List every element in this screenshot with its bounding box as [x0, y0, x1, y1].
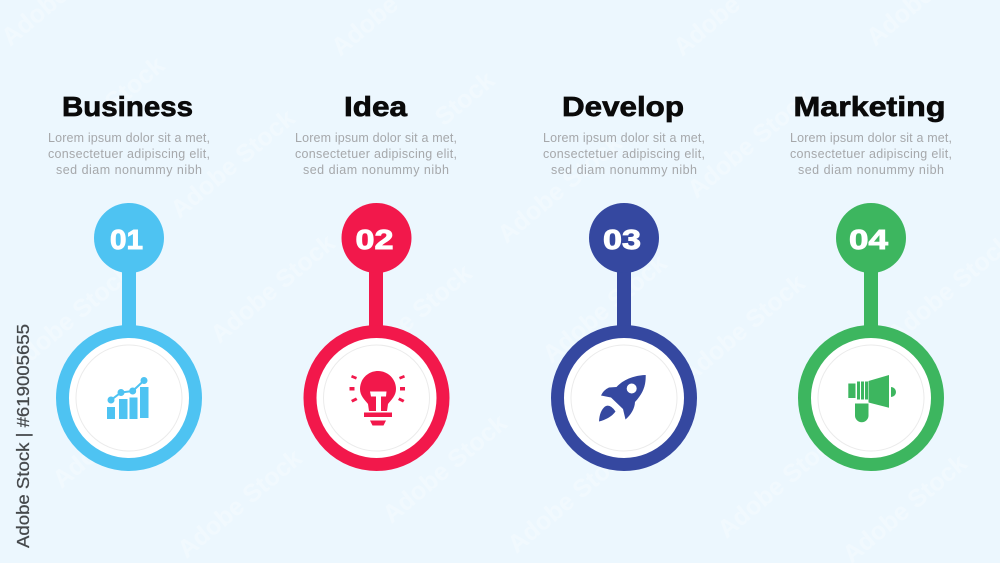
text: Adobe Stock	[205, 229, 340, 349]
text: Adobe Stock	[377, 409, 512, 529]
text block: Idea description: sed diam nonummy nibh	[303, 163, 449, 177]
text: Stock	[100, 51, 170, 116]
ring	[310, 332, 443, 464]
stem	[617, 265, 631, 335]
icon: megaphone	[848, 375, 896, 422]
stem	[864, 265, 878, 335]
text block: Marketing description	[790, 131, 952, 177]
number badge 02: 02	[356, 224, 394, 255]
number badge 04	[836, 203, 906, 273]
text block: Marketing description: sed diam nonummy nibh	[798, 163, 944, 177]
ring	[62, 332, 196, 464]
column: Business	[48, 91, 210, 464]
column: Marketing	[790, 91, 952, 464]
heading: Develop: Develop	[562, 91, 684, 122]
text block: Idea description: consectetuer adipiscing elit,	[295, 147, 457, 161]
number badge 03: 03	[603, 224, 641, 255]
number badge 02	[342, 203, 412, 273]
column: Develop	[543, 91, 705, 464]
text: Adobe Stock	[492, 129, 627, 249]
text: Adobe Stock	[47, 374, 182, 494]
icon: rocket	[599, 375, 646, 422]
number badge 01	[94, 203, 164, 273]
text block: Develop description	[543, 131, 705, 177]
text block: Idea description	[295, 131, 457, 177]
text: Adobe Stock	[502, 439, 637, 559]
text block: Develop description: sed diam nonummy nibh	[551, 163, 697, 177]
text block: Marketing description: Lorem ipsum dolor sit a met,	[790, 131, 952, 145]
text: Adobe Stock	[165, 104, 300, 224]
stem	[369, 265, 383, 335]
text: Adobe Stock	[2, 259, 137, 379]
text block: Idea description: Lorem ipsum dolor sit a met,	[295, 131, 457, 145]
text block: Business description: consectetuer adipiscing elit,	[48, 147, 210, 161]
text block: Marketing description: consectetuer adipiscing elit,	[790, 147, 952, 161]
number badge 01: 01	[110, 224, 143, 255]
text block: Business description: sed diam nonummy nibh	[56, 163, 202, 177]
heading: Marketing: Marketing	[794, 91, 946, 122]
stem	[122, 265, 136, 335]
heading: Business: Business	[62, 91, 193, 122]
text block: Develop description: Lorem ipsum dolor sit a met,	[543, 131, 705, 145]
text: Adobe Stock	[675, 269, 810, 389]
column: Idea	[295, 91, 457, 464]
text: Adobe Stock	[172, 444, 307, 563]
ring	[558, 332, 690, 464]
text block: Business description	[48, 131, 210, 177]
number badge 04: 04	[849, 224, 889, 255]
text block: Develop description: consectetuer adipiscing elit,	[543, 147, 705, 161]
text: Stock	[430, 66, 500, 131]
text: Adobe Stock	[537, 249, 672, 369]
ring	[804, 332, 938, 464]
number badge 03	[589, 203, 659, 273]
text: Adobe Stock	[712, 424, 847, 544]
text block: Business description: Lorem ipsum dolor sit a met,	[48, 131, 210, 145]
icon: bar chart	[107, 377, 148, 419]
icon: light bulb	[350, 371, 405, 426]
text: Adobe Stock	[682, 84, 817, 204]
watermark: Adobe Stock ID: Adobe Stock | #619005655	[13, 324, 33, 548]
heading: Idea: Idea	[344, 91, 407, 122]
text: Adobe Stock	[342, 259, 477, 379]
